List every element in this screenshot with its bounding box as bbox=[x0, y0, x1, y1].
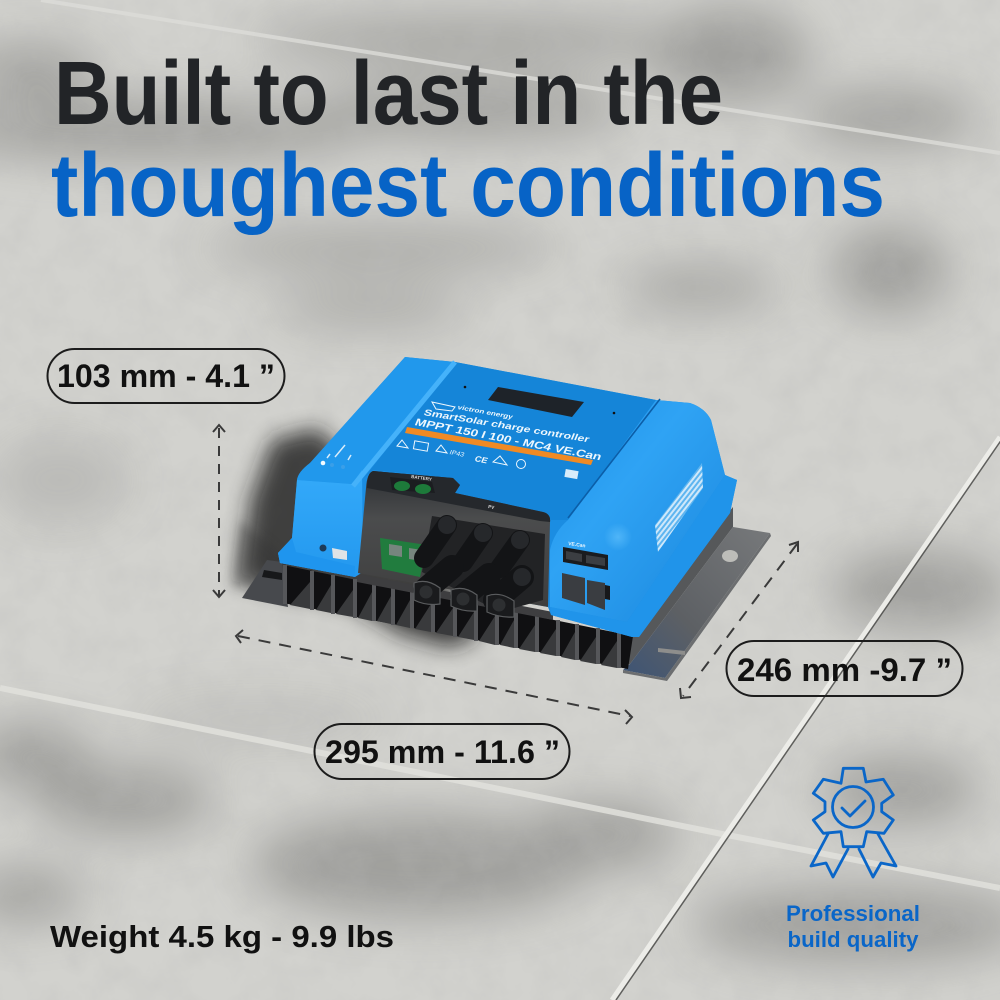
side ports: VE.Can bbox=[568, 541, 586, 549]
title bbox=[51, 44, 885, 236]
badge caption bbox=[786, 901, 920, 952]
terminal panel bbox=[358, 471, 550, 607]
title: Built to last in the bbox=[54, 44, 723, 144]
connector rings bbox=[414, 581, 514, 617]
right block bbox=[550, 400, 725, 622]
pill: height bbox=[48, 349, 284, 403]
pill: width bbox=[314, 724, 570, 779]
pill: height: 103 mm - 4.1 ” bbox=[57, 358, 275, 394]
printed label: victron energy bbox=[456, 405, 514, 421]
badge caption: Professional bbox=[786, 901, 920, 926]
fin shading bbox=[290, 582, 617, 668]
logo mark bbox=[432, 402, 455, 411]
dashed arrow: width bbox=[236, 630, 632, 724]
printed label: CE bbox=[473, 454, 490, 465]
dashed arrow: depth bbox=[680, 542, 798, 698]
green terminal block bbox=[380, 538, 427, 577]
left front block bbox=[278, 470, 363, 577]
display cover bbox=[488, 387, 584, 417]
MC4 connectors bbox=[414, 516, 545, 617]
solar charge controller bbox=[242, 357, 771, 681]
left top surface bbox=[297, 357, 455, 484]
pill: depth: 246 mm -9.7 ” bbox=[737, 652, 952, 688]
terminal panel: PV bbox=[488, 504, 495, 510]
blue enclosure bbox=[278, 357, 737, 637]
top panel bbox=[364, 362, 656, 520]
dashed arrow: height bbox=[213, 425, 225, 597]
printed label: IP43 bbox=[448, 450, 465, 459]
pill: width: 295 mm - 11.6 ” bbox=[325, 734, 560, 770]
printed label: SmartSolar charge controller bbox=[422, 408, 591, 445]
terminal panel: BATTERY bbox=[411, 474, 432, 482]
battery terminals bbox=[390, 477, 435, 493]
left flange bbox=[278, 538, 355, 577]
orange strip bbox=[405, 427, 593, 465]
right flange bbox=[550, 475, 737, 637]
badge caption: build quality bbox=[788, 927, 919, 952]
white vent label bbox=[655, 463, 703, 552]
ridge highlight bbox=[353, 362, 455, 486]
icon: gear badge with ribbons bbox=[811, 768, 896, 877]
mounting plate bbox=[242, 507, 771, 681]
heat sink bbox=[283, 565, 633, 669]
printed label: MPPT 150 I 100 - MC4 VE.Can bbox=[413, 417, 603, 463]
status leds bbox=[321, 461, 325, 465]
side ports bbox=[320, 541, 610, 610]
device ground shadow bbox=[232, 428, 480, 648]
printed label bbox=[321, 386, 615, 479]
weight label: Weight 4.5 kg - 9.9 lbs bbox=[50, 919, 394, 954]
title: thoughest conditions bbox=[51, 136, 885, 236]
pill: depth bbox=[726, 641, 962, 696]
